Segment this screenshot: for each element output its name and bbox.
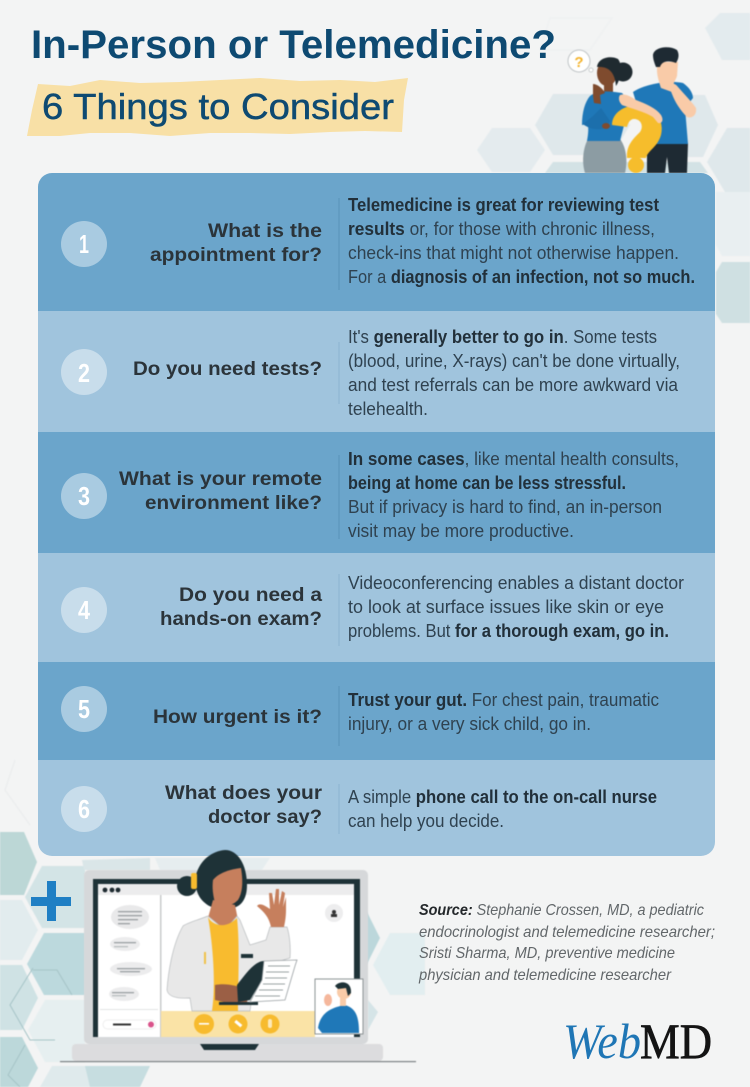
source note: Source: Stephanie Crossen, MD, a pediatric (419, 902, 704, 919)
row 5: injury, or a very sick child, go in. (348, 714, 591, 734)
row 6: A simple phone call to the on-call nurse (348, 787, 657, 807)
row 4: problems. But for a thorough exam, go in. (348, 621, 669, 641)
row 6: doctor say? (208, 807, 322, 828)
row 1: 1 (79, 229, 89, 259)
row 5 (38, 662, 715, 760)
row 1: check-ins that might not otherwise happen. (348, 243, 679, 263)
background hexagons: top right (477, 13, 750, 323)
inset video of patient (315, 979, 363, 1034)
background hexagons: bottom left (0, 760, 425, 1087)
row 3: But if privacy is hard to find, an in-person (348, 497, 662, 517)
man (633, 47, 696, 173)
woman (582, 57, 632, 173)
illustration: laptop with doctor video call (60, 850, 416, 1062)
chat panel (100, 895, 162, 1037)
row 1: For a diagnosis of an infection, not so much. (348, 267, 695, 287)
thought bubble: ? (574, 54, 584, 71)
row 4: Videoconferencing enables a distant doctor (348, 573, 684, 593)
row 5: 5 (78, 694, 90, 724)
row 2: (blood, urine, X-rays) can't be done virtually, (348, 351, 680, 371)
source note: Sristi Sharma, MD, preventive medicine (419, 945, 675, 962)
row 5: Trust your gut. For chest pain, traumatic (348, 690, 659, 710)
row 2 (38, 311, 715, 432)
row 6 (38, 760, 715, 856)
WebMD logo: Web (563, 1013, 641, 1069)
source note: physician and telemedicine researcher (418, 967, 672, 984)
illustration: two people with question mark (568, 47, 696, 173)
row 1: appointment for? (150, 245, 322, 266)
row 3: 3 (78, 481, 90, 511)
row 2: It's generally better to go in. Some tests (348, 327, 657, 347)
row 3: visit may be more productive. (348, 521, 574, 541)
doctor (167, 850, 297, 1011)
source note: endocrinologist and telemedicine researcher; (419, 924, 715, 941)
row 1: results or, for those with chronic illness, (348, 219, 655, 239)
row 3: being at home can be less stressful. (348, 473, 626, 493)
row 1 (38, 173, 715, 311)
WebMD logo (563, 1013, 712, 1069)
panel: six considerations (38, 173, 715, 856)
row 6: What does your (165, 783, 323, 804)
subtitle with yellow highlight: 6 Things to Consider (42, 86, 394, 127)
row 2: 2 (78, 358, 90, 388)
row 2: telehealth. (348, 399, 428, 419)
laptop body (60, 870, 416, 1062)
icon: blue plus (31, 881, 71, 921)
row 3: environment like? (145, 493, 322, 514)
row 5: How urgent is it? (153, 707, 322, 728)
row 3 (38, 432, 715, 553)
WebMD logo: MD (640, 1013, 712, 1069)
row 4: 4 (78, 595, 90, 625)
row 4: Do you need a (179, 585, 322, 606)
row 6: can help you decide. (348, 811, 504, 831)
row 4 (38, 553, 715, 662)
question mark (612, 94, 662, 173)
control bar (161, 1011, 315, 1037)
row 2: Do you need tests? (133, 359, 322, 380)
row 4: hands-on exam? (160, 609, 322, 630)
icon: add participant (325, 904, 343, 922)
title: In-Person or Telemedicine? (31, 23, 556, 67)
row 1: What is the (208, 221, 322, 242)
row 1: Telemedicine is great for reviewing test (348, 195, 659, 215)
row 6: 6 (78, 794, 90, 824)
row 4: to look at surface issues like skin or eye (348, 597, 664, 617)
row 2: and test referrals can be more awkward via (348, 375, 679, 395)
row 3: What is your remote (119, 469, 322, 490)
row 3: In some cases, like mental health consults, (348, 449, 679, 469)
source note (418, 902, 715, 984)
subtitle with yellow highlight (27, 78, 408, 136)
